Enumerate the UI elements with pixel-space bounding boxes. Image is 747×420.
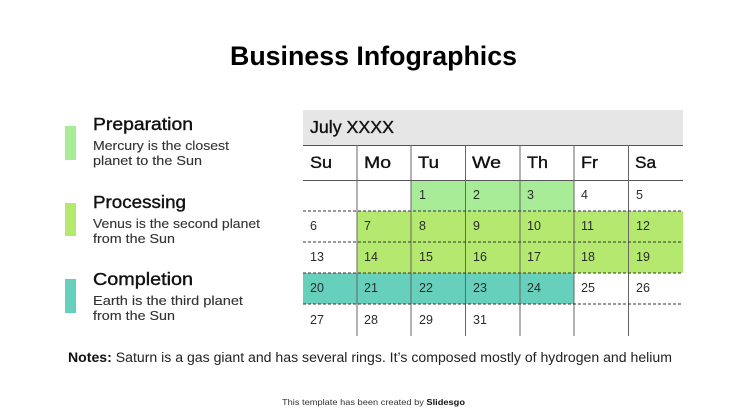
legend item: processing: Processing xyxy=(93,192,186,212)
calendar month header: July XXXX xyxy=(310,117,394,137)
weekday labels: We xyxy=(472,154,501,172)
day numbers: 16 xyxy=(473,250,487,264)
day numbers: 3 xyxy=(527,188,534,202)
day numbers: 10 xyxy=(527,219,541,233)
day numbers: 11 xyxy=(581,219,594,233)
legend xyxy=(65,114,260,323)
day numbers: 21 xyxy=(364,281,378,295)
day numbers: 2 xyxy=(473,188,480,202)
weekday labels: Fr xyxy=(581,154,599,172)
weekday labels: Th xyxy=(527,154,548,172)
calendar xyxy=(303,110,683,336)
day numbers: 6 xyxy=(310,219,317,233)
day numbers: 12 xyxy=(636,219,650,233)
day numbers: 1 xyxy=(419,188,426,202)
day numbers xyxy=(310,188,650,327)
legend item: preparation: Mercury is the closest xyxy=(93,138,229,153)
legend item: completion xyxy=(65,269,243,323)
footer credit: This template has been created by Slidesgo xyxy=(282,397,465,407)
day numbers: 26 xyxy=(636,281,650,295)
weekday labels: Su xyxy=(310,154,332,172)
day numbers: 24 xyxy=(527,281,541,295)
legend item: preparation xyxy=(65,114,229,168)
legend item: completion: Earth is the third planet xyxy=(93,293,243,308)
day numbers: 18 xyxy=(581,250,595,264)
day numbers: 8 xyxy=(419,219,426,233)
day numbers: 9 xyxy=(473,219,480,233)
title: Business Infographics xyxy=(230,41,517,71)
calendar grid lines xyxy=(303,145,683,336)
day numbers: 23 xyxy=(473,281,487,295)
day numbers: 28 xyxy=(364,313,378,327)
day numbers: 14 xyxy=(364,250,378,264)
highlighted days xyxy=(303,180,683,304)
day numbers: 13 xyxy=(310,250,324,264)
legend item: preparation: Preparation xyxy=(93,114,193,134)
legend item: processing: from the Sun xyxy=(93,231,175,246)
day numbers: 27 xyxy=(310,313,324,327)
weekday labels: Tu xyxy=(418,154,439,172)
legend item: processing xyxy=(65,192,260,246)
day numbers: 20 xyxy=(310,281,324,295)
day numbers: 5 xyxy=(636,188,643,202)
legend item: completion: Completion xyxy=(93,269,193,289)
legend item: preparation: planet to the Sun xyxy=(93,153,202,168)
day numbers: 4 xyxy=(581,188,588,202)
day numbers: 25 xyxy=(581,281,595,295)
legend item: processing: Venus is the second planet xyxy=(93,216,260,231)
day numbers: 7 xyxy=(364,219,371,233)
day numbers: 29 xyxy=(419,313,433,327)
legend item: completion: from the Sun xyxy=(93,308,175,323)
day numbers: 22 xyxy=(419,281,433,295)
day numbers: 19 xyxy=(636,250,650,264)
day numbers: 17 xyxy=(527,250,541,264)
calendar month header xyxy=(303,110,683,145)
weekday labels: Mo xyxy=(364,154,391,172)
day numbers: 15 xyxy=(419,250,433,264)
notes: Notes: Saturn is a gas giant and has several rings. It’s composed mostly of hydrogen and helium xyxy=(68,350,672,365)
weekday labels xyxy=(310,154,657,172)
day numbers: 31 xyxy=(473,313,487,327)
weekday labels: Sa xyxy=(635,154,657,172)
